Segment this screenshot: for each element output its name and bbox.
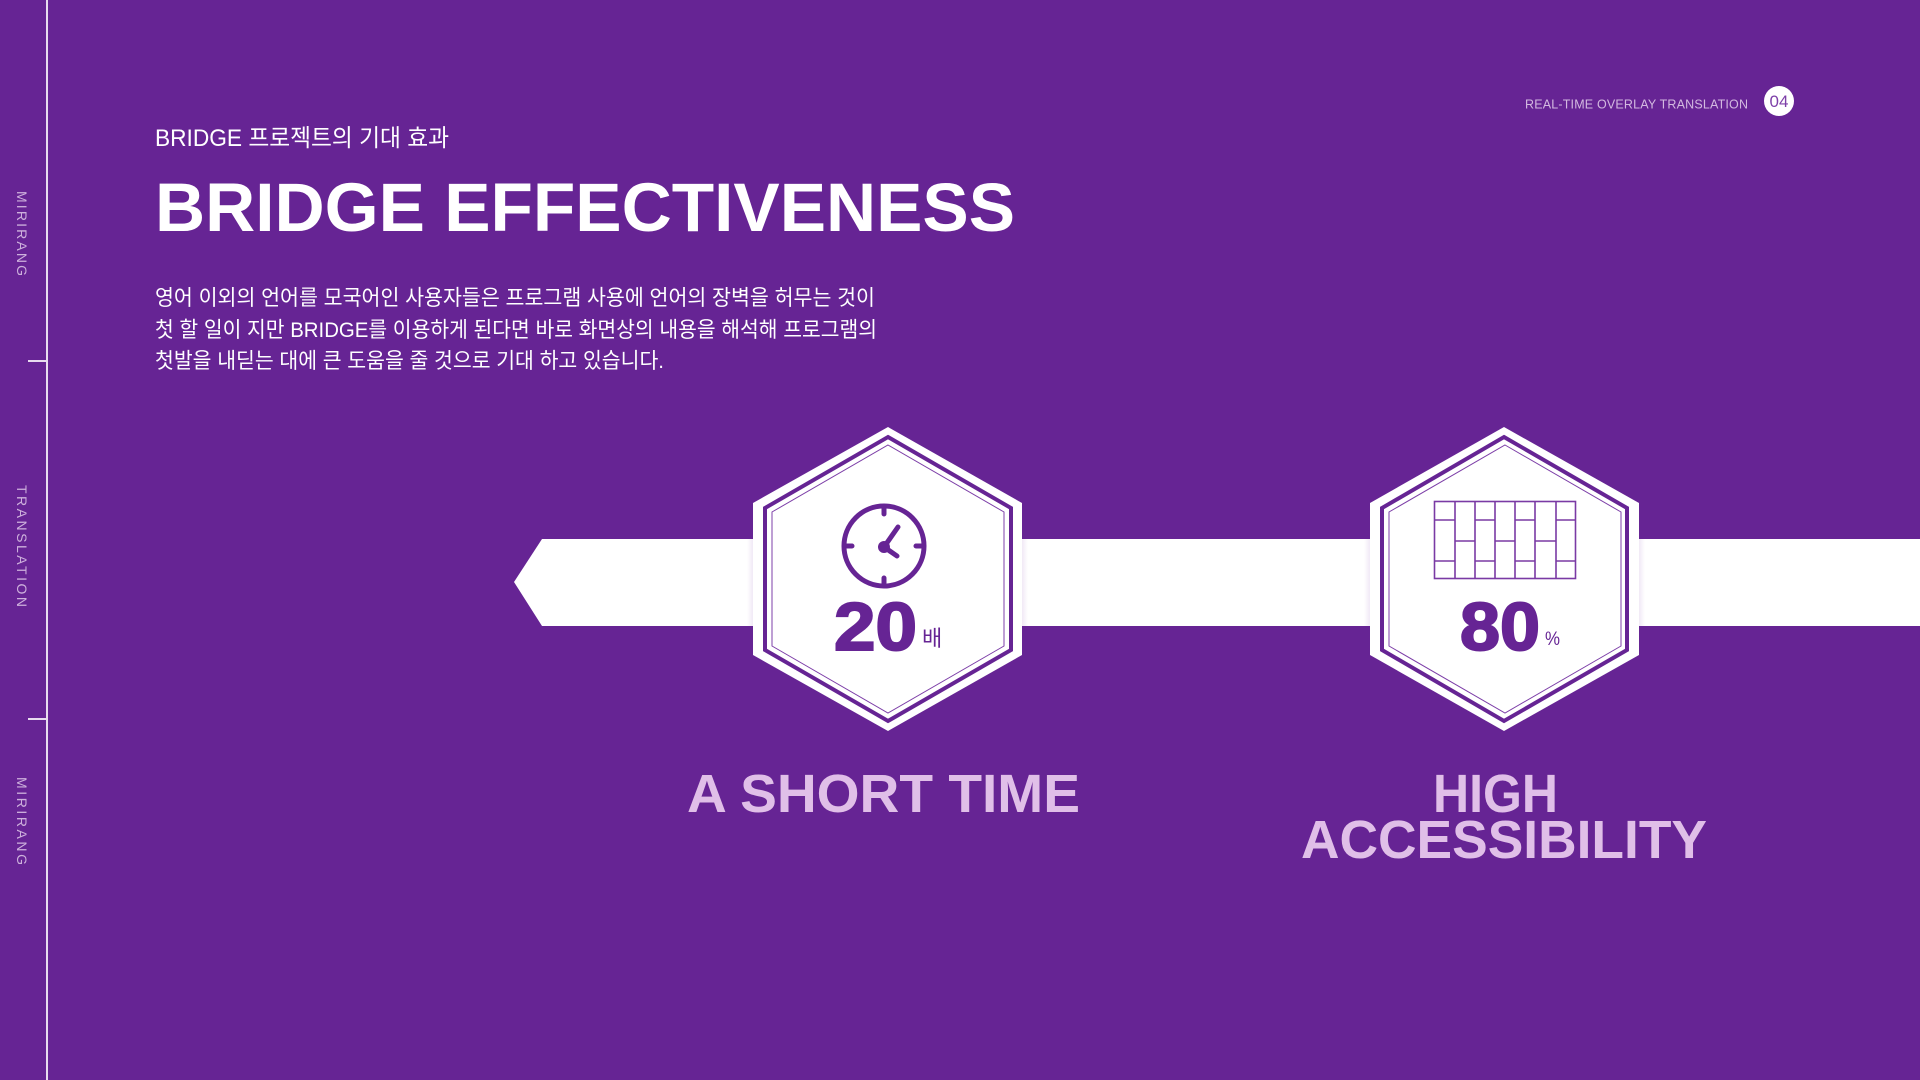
subtitle: BRIDGE 프로젝트의 기대 효과: [155, 125, 449, 152]
label: high accessibility: [1301, 764, 1707, 870]
body paragraph: 첫 할 일이 지만 BRIDGE를 이용하게 된다면 바로 화면상의 내용을 해석해 프로그램의: [155, 318, 877, 342]
body paragraph: [155, 286, 877, 373]
page number badge: [1764, 86, 1794, 116]
sidebar label: MIRIRANG bottom: MIRIRANG: [14, 777, 30, 865]
sidebar label: TRANSLATION: TRANSLATION: [14, 485, 30, 607]
hexagon badge: 20x: [753, 427, 1022, 731]
sidebar rail: [14, 0, 48, 1080]
icon: brick wall: [1434, 501, 1576, 579]
stat unit: %: [1545, 629, 1560, 650]
label: a short time: A SHORT TIME: [687, 764, 1080, 824]
body paragraph: 영어 이외의 언어를 모국어인 사용자들은 프로그램 사용에 언어의 장벽을 허무는 것이: [155, 286, 875, 310]
stat: 20: 20: [834, 589, 917, 665]
sidebar label: MIRIRANG top: MIRIRANG: [14, 191, 30, 276]
page number badge: 04: [1770, 92, 1788, 111]
header tag: real-time overlay translation: REAL-TIME OVERLAY TRANSLATION: [1525, 98, 1748, 112]
label: high accessibility: ACCESSIBILITY: [1301, 810, 1707, 870]
stat unit: 배: [922, 626, 942, 651]
body paragraph: 첫발을 내딛는 대에 큰 도움을 줄 것으로 기대 하고 있습니다.: [155, 349, 664, 373]
header tag: real-time overlay translation: [1525, 86, 1794, 116]
stat: 80: 80: [1460, 589, 1540, 665]
arrow band: [514, 539, 1920, 626]
icon: clock: [844, 506, 924, 586]
hexagon badge: 80%: [1370, 427, 1639, 731]
label: high accessibility: HIGH: [1433, 764, 1558, 824]
title: BRIDGE EFFECTIVENESS: [155, 169, 1015, 246]
